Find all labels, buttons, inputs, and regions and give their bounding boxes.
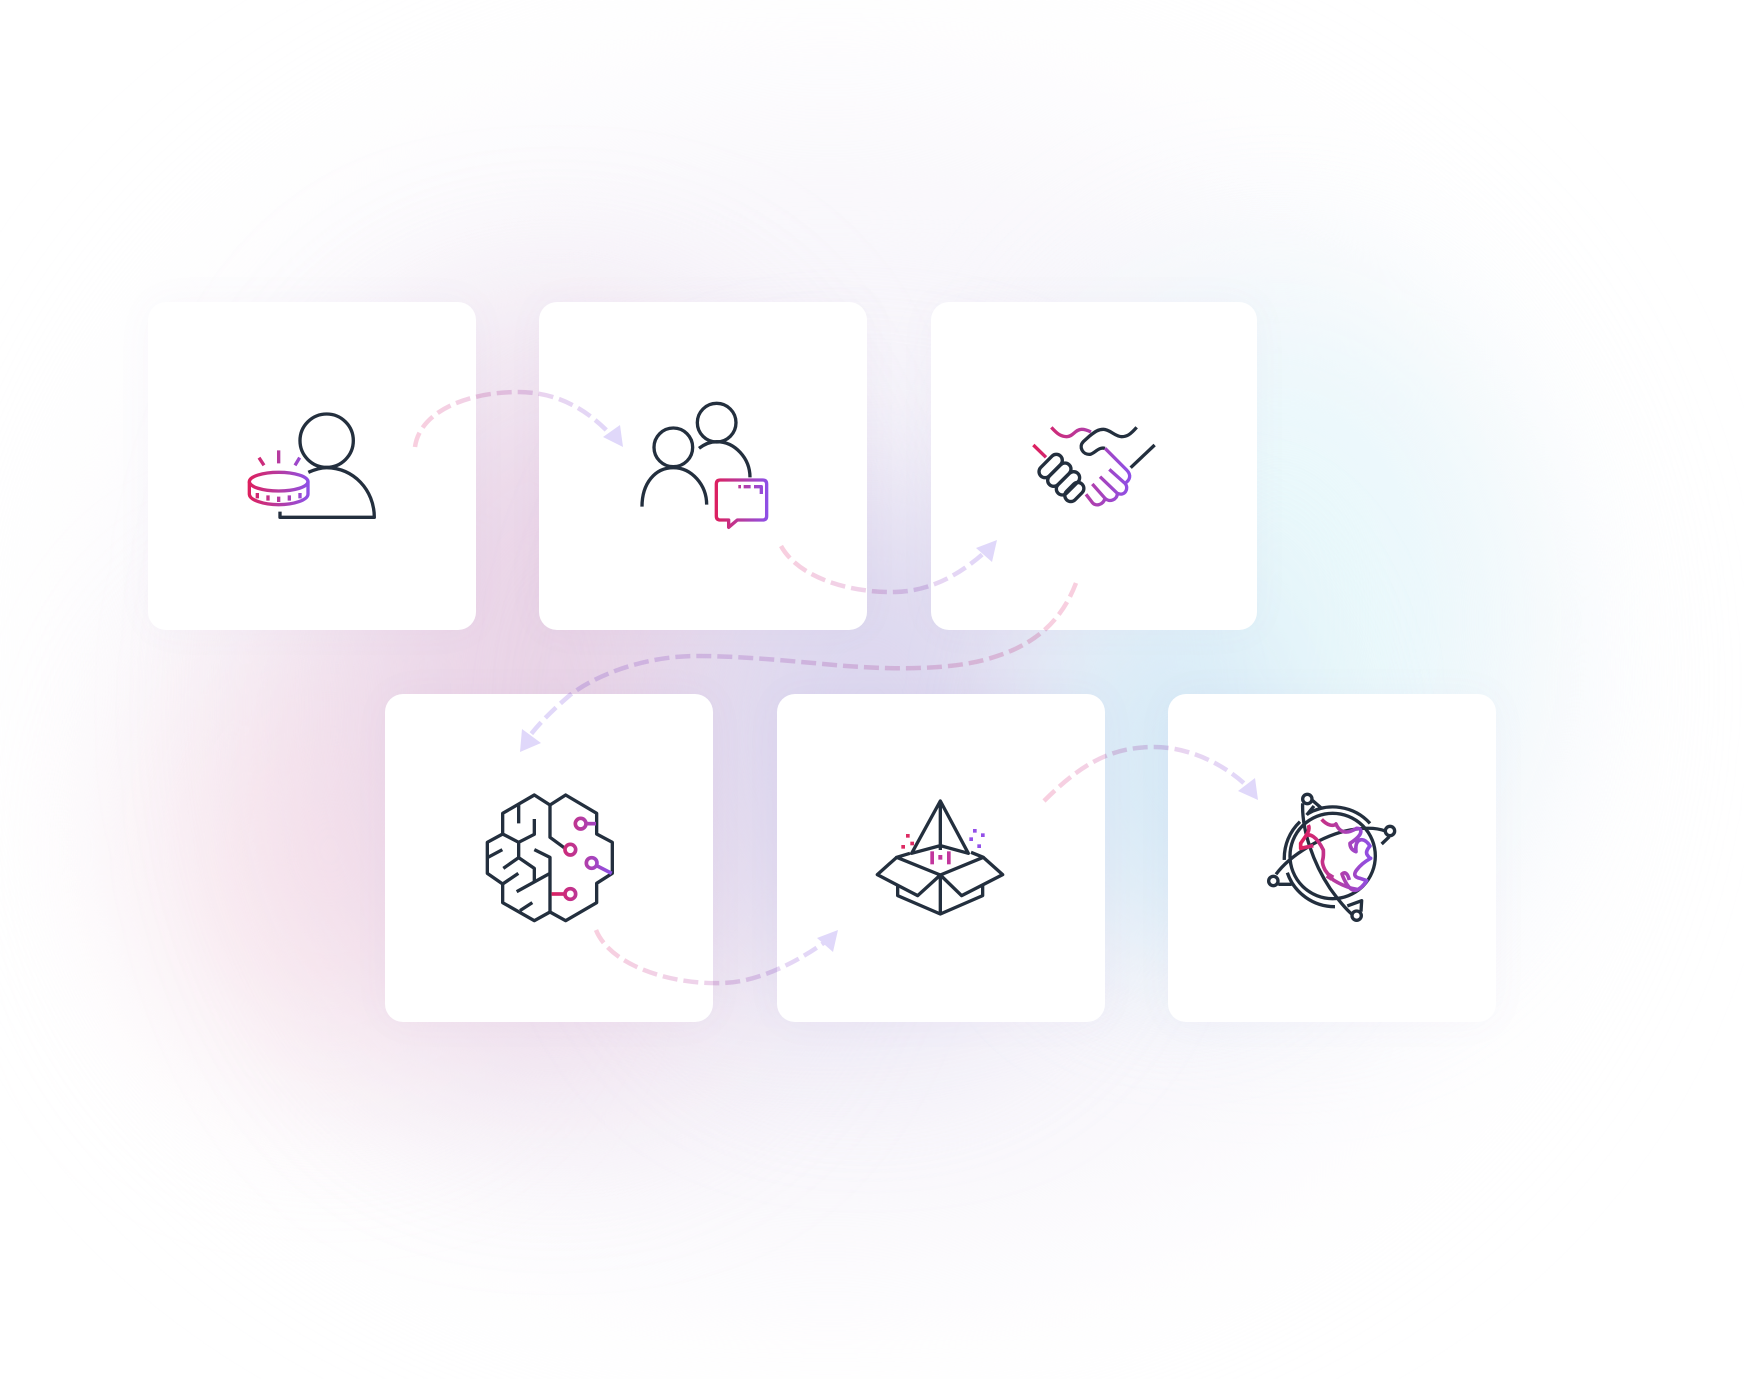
card: launch box (776, 694, 1104, 1022)
arrow: person to people (415, 392, 623, 447)
icon: box launching kite (877, 801, 1003, 914)
icon: person with coin (249, 414, 374, 517)
arrow: people to handshake (781, 540, 997, 592)
arrow: brain to box (596, 930, 838, 983)
icon: brain circuit (487, 795, 612, 921)
card: brain (385, 694, 713, 1022)
card: person with coin (148, 302, 476, 630)
icon: handshake (1033, 427, 1155, 505)
icon: globe with orbits (1269, 794, 1395, 920)
arrow: box to globe (1044, 747, 1258, 801)
card: people chatting (539, 302, 867, 630)
icon: two people with speech bubble (642, 403, 767, 527)
arrow: handshake to brain (520, 583, 1076, 752)
card: globe (1168, 694, 1496, 1022)
card: handshake (931, 302, 1257, 630)
